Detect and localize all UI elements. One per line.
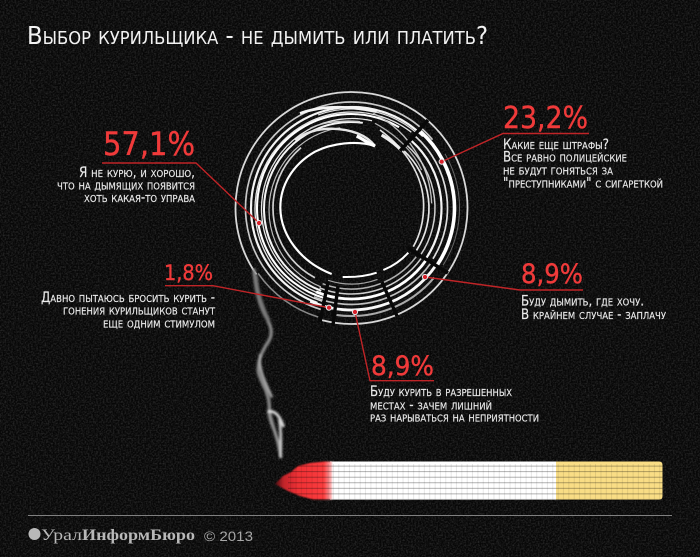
callout: 23,2%: не будут гоняться за	[503, 162, 613, 178]
callout: 57,1%: хоть какая-то управа	[84, 190, 195, 206]
footer rule	[28, 514, 672, 516]
callout: 8,9% bottom: Буду курить в разрешенных	[370, 384, 512, 400]
inner hook spiral	[280, 107, 432, 277]
callout: 1,8%: еще одним стимулом	[103, 316, 215, 332]
footer logo: © 2013	[204, 528, 253, 544]
callout: 57,1%: Я не курю, и хорошо,	[79, 165, 195, 181]
footer logo: Урал	[41, 527, 82, 544]
segment 57,1% rings	[190, 46, 513, 370]
callout: 23,2%: Какие еще штрафы?	[503, 137, 609, 153]
callout: 1,8%: Давно пытаюсь бросить курить -	[41, 290, 215, 306]
callout: 23,2%: 23,2%	[503, 101, 588, 136]
callout: 57,1%	[57, 125, 262, 226]
footer logo: ИнформБюро	[82, 527, 195, 544]
callout: 57,1%: что на дымящих появится	[57, 178, 195, 194]
callout: 23,2%: "преступниками" с сигареткой	[503, 176, 663, 192]
callout: 8,9% bottom: раз нарываться на неприятности	[370, 410, 539, 426]
segment 23,2% rings	[204, 60, 499, 356]
callout: 23,2%: Все равно полицейские	[503, 150, 627, 166]
paper	[330, 462, 556, 500]
footer logo	[28, 527, 253, 544]
segment dividers	[320, 120, 448, 325]
callout: 8,9% right: В крайнем случае - заплачу	[521, 307, 666, 323]
callout: 1,8%: гонения курильщиков станут	[63, 302, 216, 318]
smoke	[254, 270, 283, 457]
segments 8,9%, 8,9% and 1,8% rings	[199, 56, 504, 360]
callout: 8,9% bottom: местах - зачем лишний	[370, 397, 492, 413]
grid lines	[288, 464, 662, 500]
callout: 57,1%: 57,1%	[103, 125, 195, 163]
callout: 8,9% bottom: 8,9%	[371, 351, 434, 382]
callout: 8,9% bottom	[352, 309, 539, 426]
callout: 8,9% right: 8,9%	[521, 259, 583, 290]
filter	[556, 462, 662, 500]
burning tip	[275, 462, 332, 500]
smoke ring chart	[190, 46, 513, 370]
callout: 23,2%	[439, 101, 663, 192]
title: Выбор курильщика - не дымить или платить?	[27, 21, 488, 50]
callout: 8,9% right: Буду дымить, где хочу.	[521, 294, 644, 310]
callout: 1,8%: 1,8%	[164, 261, 213, 285]
callout: 1,8%	[41, 261, 332, 332]
cigarette	[275, 462, 662, 500]
callout: 8,9% right	[422, 259, 666, 323]
